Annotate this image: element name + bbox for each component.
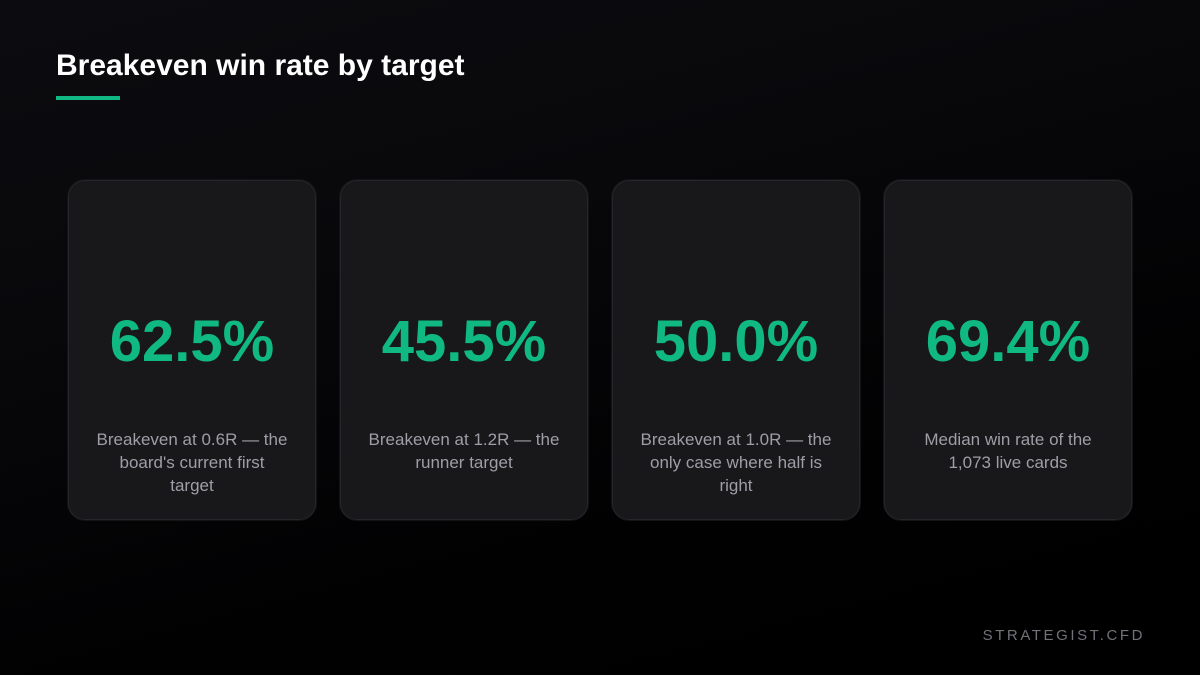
stat: 50.0%: 50.0% — [654, 309, 818, 374]
description: 0.6R: board's current first — [120, 453, 264, 472]
panel: breakeven at 1.2R — [340, 180, 588, 520]
description: 1.0R: Breakeven at 1.0R — the — [641, 430, 831, 449]
description: median — [924, 430, 1092, 472]
stat: 45.5%: 45.5% — [382, 309, 546, 374]
panel: breakeven at 1.0R — [612, 180, 860, 520]
description: median: 1,073 live cards — [948, 453, 1068, 472]
description: 1.2R: Breakeven at 1.2R — the — [369, 430, 559, 449]
panel: median win rate — [884, 180, 1132, 520]
description: 1.0R: right — [719, 476, 753, 495]
panel: breakeven at 0.6R — [68, 180, 316, 520]
description: 1.2R: runner target — [415, 453, 513, 472]
description: 0.6R — [97, 430, 287, 495]
brand footer: STRATEGIST.CFD — [983, 627, 1145, 644]
description: 1.0R: only case where half is — [650, 453, 822, 472]
title: Breakeven win rate by target — [56, 49, 465, 82]
description: 0.6R: Breakeven at 0.6R — the — [97, 430, 287, 449]
stat: 69.4%: 69.4% — [926, 309, 1090, 374]
description: 0.6R: target — [170, 476, 214, 495]
title accent rule — [56, 96, 120, 100]
description: 1.0R — [641, 430, 831, 495]
description: median: Median win rate of the — [924, 430, 1092, 449]
stat: 62.5%: 62.5% — [110, 309, 274, 374]
description: 1.2R — [369, 430, 559, 472]
